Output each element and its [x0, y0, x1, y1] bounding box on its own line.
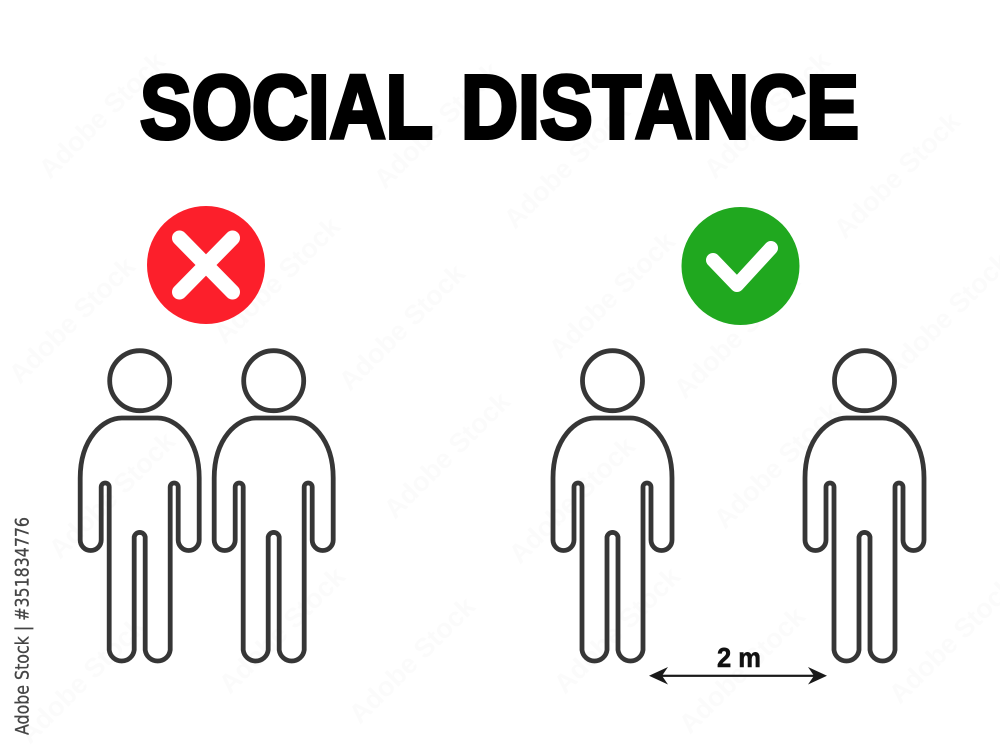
icon: red cross [147, 206, 265, 324]
person: distanced, right [805, 351, 924, 661]
person: too close, left [80, 351, 199, 661]
watermark pattern: Adobe Stock [698, 46, 837, 184]
watermark pattern: Adobe Stock [43, 426, 182, 564]
watermark pattern: Adobe Stock [503, 431, 642, 569]
icon: green check [682, 207, 800, 325]
title [140, 58, 859, 158]
watermark pattern: Adobe Stock [208, 211, 347, 349]
watermark pattern: Adobe Stock [708, 396, 847, 534]
watermark pattern: Adobe Stock [33, 46, 172, 184]
arrow: two metres [649, 667, 827, 684]
title: SOCIAL [140, 58, 433, 158]
watermark pattern: Adobe Stock [673, 601, 812, 739]
title: DISTANCE [461, 58, 859, 158]
watermark pattern: Adobe Stock [668, 266, 807, 404]
watermark pattern: Adobe Stock [378, 386, 517, 524]
watermark pattern: Adobe Stock [343, 591, 482, 729]
distance label: 2 m [717, 642, 761, 673]
watermark pattern: Adobe Stock [13, 611, 152, 749]
stock id text: Adobe Stock | #351834776 [12, 517, 34, 735]
watermark pattern: Adobe Stock [543, 226, 682, 364]
watermark pattern: Adobe Stock [3, 251, 142, 389]
watermark pattern: Adobe Stock [498, 96, 637, 234]
person: too close, right [214, 351, 333, 661]
watermark pattern: Adobe Stock [333, 258, 472, 396]
person: distanced, left [553, 351, 672, 661]
watermark pattern: Adobe Stock [213, 561, 352, 699]
watermark pattern: Adobe Stock [368, 56, 507, 194]
watermark pattern: Adobe Stock [828, 106, 967, 244]
watermark pattern: Adobe Stock [548, 561, 687, 699]
